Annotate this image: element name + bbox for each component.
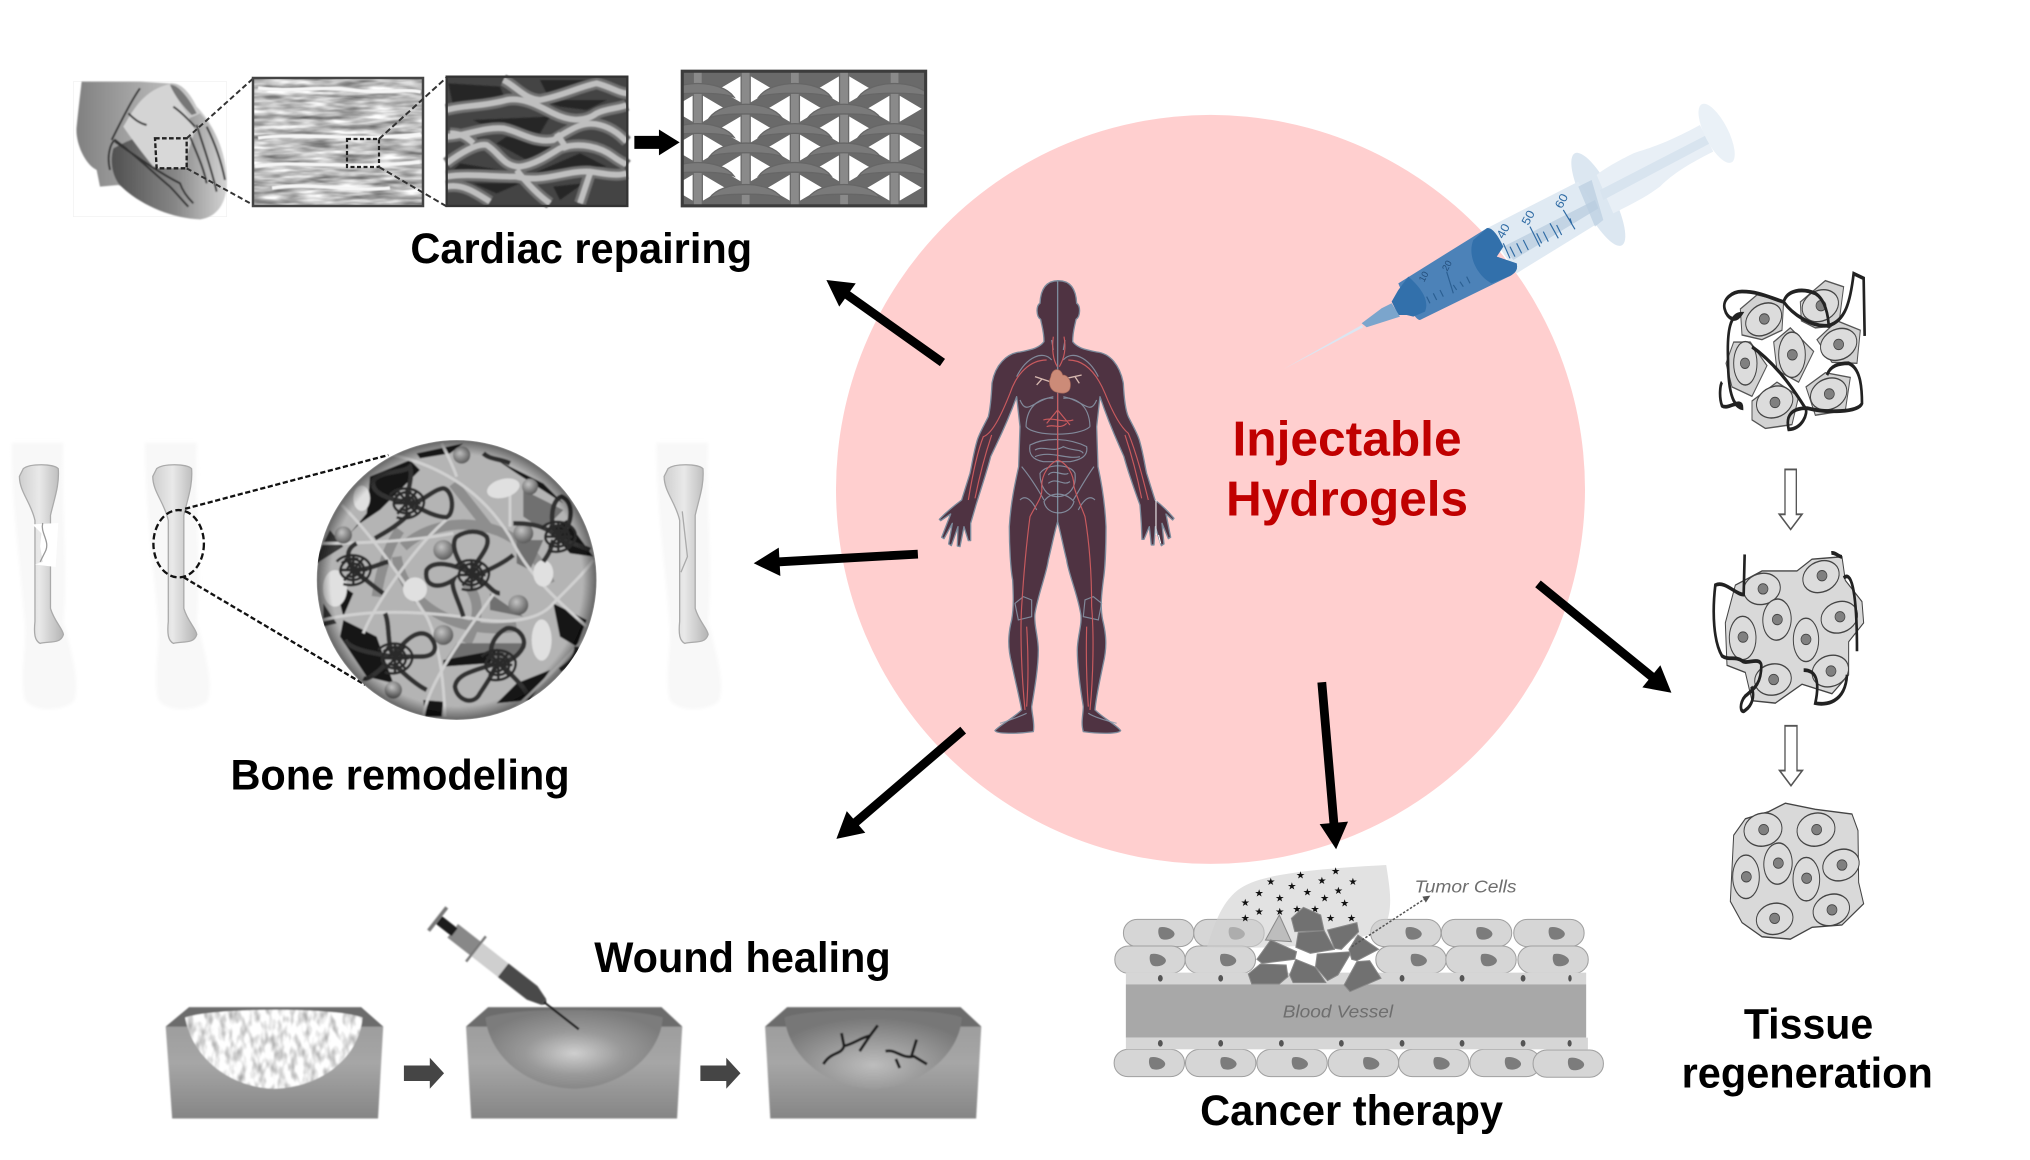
heading: bone remodeling: Bone remodeling <box>230 752 570 800</box>
panel: cardiac repairing <box>73 71 931 273</box>
hydrogel cloud with stars: ★ <box>1275 894 1284 905</box>
hydrogel cloud with stars: ★ <box>1317 876 1326 887</box>
arrow down <box>1779 469 1802 529</box>
stage 2: partially degraded hydrogel <box>1714 553 1864 711</box>
normal cell rows <box>1114 919 1603 1077</box>
heading: wound healing: Wound healing <box>594 934 891 982</box>
hydrogel cloud with stars <box>1207 865 1390 948</box>
hydrogel cloud with stars: ★ <box>1296 870 1305 881</box>
panel: cancer therapy <box>1114 865 1603 1077</box>
hydrogel cloud with stars: ★ <box>1303 887 1312 898</box>
hydrogel cloud with stars: ★ <box>1275 907 1284 918</box>
hydrogel cloud with stars: ★ <box>1310 905 1320 916</box>
panel: wound healing <box>166 905 981 1119</box>
dashed zoom lines to sphere <box>184 455 388 685</box>
sphere: hydrogel network <box>317 440 597 720</box>
scale numerals: 60 <box>1552 191 1571 211</box>
arrow: heart mesh to scaffold <box>634 129 680 155</box>
wound block 3 <box>765 1007 981 1119</box>
hydrogel cloud with stars: ★ <box>1241 898 1250 909</box>
hydrogel cloud with stars: ★ <box>1326 914 1335 925</box>
body silhouette <box>939 281 1174 733</box>
heading: tissue regeneration <box>1682 1000 1933 1097</box>
needle <box>1283 325 1363 369</box>
plunger and flanges <box>1561 99 1742 252</box>
heading: cancer therapy: Cancer therapy <box>1200 1087 1503 1135</box>
micrograph: woven scaffold <box>662 71 931 206</box>
wound block 2 <box>466 1007 682 1119</box>
arrows from centre <box>753 268 1680 851</box>
heading: tissue regeneration: Tissue <box>1744 1000 1873 1048</box>
wound block 1 <box>166 1007 383 1119</box>
image artefact at right hand <box>1156 500 1161 543</box>
hydrogel cloud with stars: ★ <box>1334 886 1343 897</box>
stage 1: cells in hydrogel <box>1720 274 1865 429</box>
arrow <box>700 1058 741 1089</box>
heading: tissue regeneration: regeneration <box>1682 1049 1933 1097</box>
hydrogel cloud with stars: ★ <box>1320 894 1329 905</box>
scale numerals: 10 <box>1417 270 1431 284</box>
heading: injectable hydrogels: Hydrogels <box>1226 471 1468 526</box>
hydrogel cloud with stars: ★ <box>1254 889 1264 900</box>
panel: tissue regeneration <box>1714 274 1865 939</box>
hydrogel cloud with stars: ★ <box>1254 907 1264 918</box>
micrograph: tissue texture <box>253 78 446 206</box>
organ outlines <box>1000 340 1117 723</box>
tumor cells label and dotted arrow <box>1352 877 1517 947</box>
background circle <box>836 115 1585 864</box>
arrow: to cardiac <box>818 268 951 374</box>
arrow: to tissue <box>1529 573 1680 704</box>
heart organ <box>1049 370 1070 393</box>
micrograph: fibre mesh <box>447 77 627 206</box>
blood vessels <box>968 337 1148 710</box>
barrel <box>1362 180 1603 327</box>
arrow: to bone <box>753 540 919 577</box>
tumor cells label and dotted arrow: Tumor Cells <box>1414 877 1517 896</box>
bone 1 fractured <box>12 443 76 709</box>
hydrogel cloud with stars: ★ <box>1287 881 1296 892</box>
scale numerals: 20 <box>1440 259 1454 273</box>
heading: injectable hydrogels: Injectable <box>1232 412 1462 467</box>
arrow down <box>1780 726 1802 786</box>
bone 2 with dashed selection <box>145 443 210 709</box>
arrow <box>404 1058 444 1089</box>
panel: bone remodeling <box>12 440 721 800</box>
blood vessel <box>1126 973 1588 1049</box>
hydrogel cloud with stars: ★ <box>1266 877 1275 888</box>
hydrogel cloud with stars: ★ <box>1292 905 1302 916</box>
human body figure <box>939 281 1174 733</box>
hydrogel cloud with stars: ★ <box>1241 914 1250 925</box>
scale numerals: 40 <box>1494 221 1513 241</box>
scale numerals <box>1417 191 1571 284</box>
arrow: to cancer <box>1308 681 1350 851</box>
heading: injectable hydrogels <box>1226 412 1468 526</box>
lung branches <box>1035 375 1082 385</box>
blood vessel: Blood Vessel <box>1283 1001 1394 1021</box>
hydrogel cloud with stars: ★ <box>1348 877 1358 888</box>
scale numerals: 50 <box>1519 208 1538 227</box>
hydrogel cloud with stars: ★ <box>1331 866 1340 877</box>
arrow: to wound <box>827 719 972 850</box>
stage 3: regenerated tissue <box>1730 803 1864 939</box>
icon: grayscale heart <box>73 78 253 219</box>
syringe <box>1283 99 1742 369</box>
heading: cardiac repairing: Cardiac repairing <box>410 225 752 273</box>
bone 3 healed <box>656 443 721 709</box>
scale ticks <box>1427 210 1575 303</box>
hydrogel cloud with stars: ★ <box>1340 899 1349 910</box>
tumor cells <box>1248 907 1381 992</box>
syringe applying hydrogel <box>426 905 589 1042</box>
hydrogel cloud with stars: ★ <box>1347 914 1356 925</box>
